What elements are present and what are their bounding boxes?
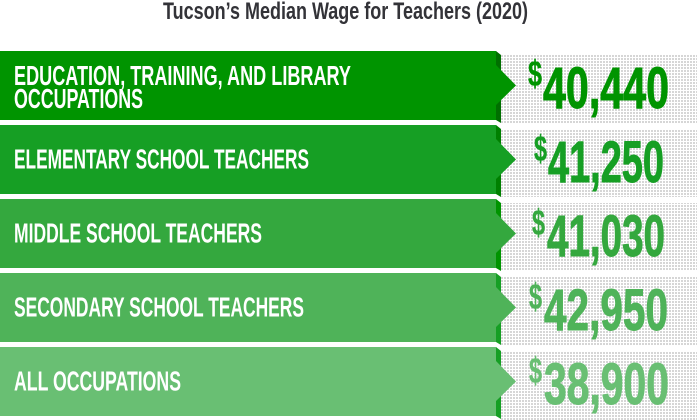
row: middle school teachers: MIDDLE SCHOOL TEACHERS (14, 218, 262, 248)
row: secondary school teachers (0, 273, 697, 345)
row: all occupations: ALL OCCUPATIONS (14, 366, 181, 396)
row: middle school teachers (0, 199, 697, 271)
row: elementary school teachers: $ (534, 128, 547, 169)
row: secondary school teachers: SECONDARY SCHOOL TEACHERS (14, 292, 304, 322)
row: education, training, and library occupations (0, 51, 697, 123)
row: elementary school teachers (0, 125, 697, 197)
row: education, training, and library occupations: EDUCATION, TRAINING, AND LIBRARY (14, 60, 351, 91)
row: elementary school teachers: ELEMENTARY SCHOOL TEACHERS (14, 144, 309, 174)
row: secondary school teachers: $ (529, 276, 542, 317)
row: education, training, and library occupations: OCCUPATIONS (14, 83, 143, 114)
row: education, training, and library occupations: $ (528, 53, 542, 94)
row: middle school teachers: $ (532, 202, 545, 243)
row: all occupations: $ (529, 350, 542, 391)
row: all occupations (0, 347, 697, 420)
